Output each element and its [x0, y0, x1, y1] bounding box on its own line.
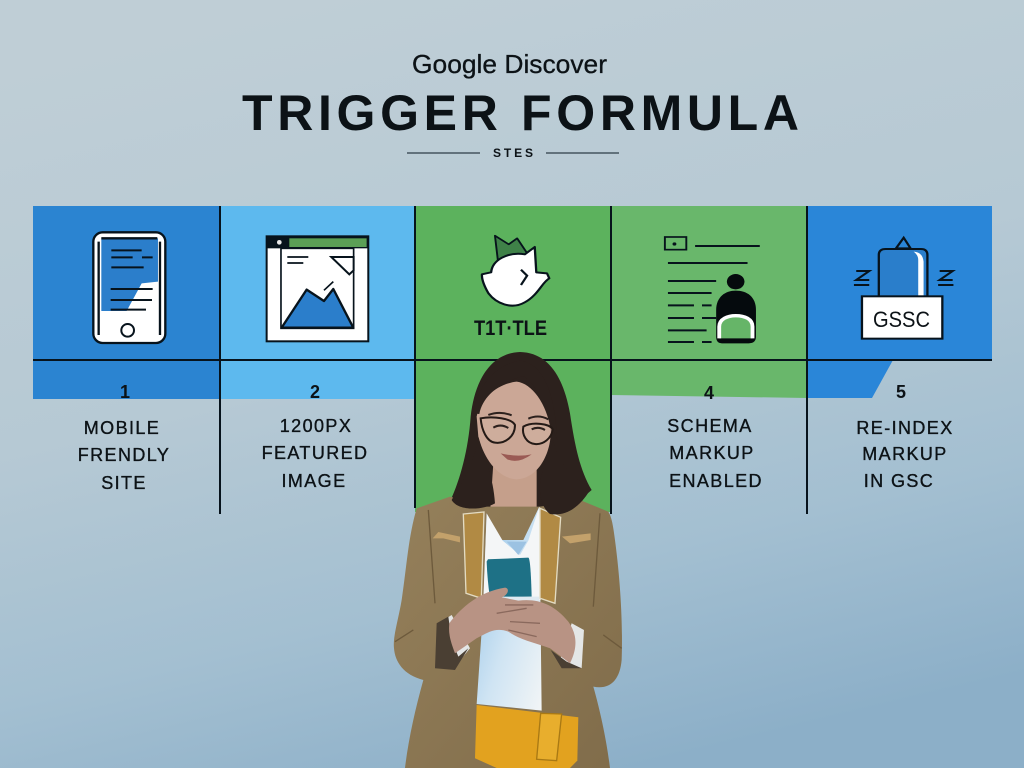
hands — [449, 588, 575, 663]
dark sleeve openings — [435, 617, 582, 670]
phone — [487, 558, 532, 598]
jacket — [394, 497, 622, 768]
step 1: MOBILE — [84, 418, 160, 438]
step 2: IMAGE — [281, 471, 347, 491]
panel 1 band — [33, 206, 220, 399]
eyebrows eyes nose — [488, 413, 548, 430]
neck — [490, 463, 537, 543]
glasses — [481, 417, 553, 444]
left cuff — [437, 615, 470, 668]
step 1: FRENDLY — [78, 445, 170, 465]
panel: step colour bands — [33, 206, 992, 512]
step 5: IN GSC — [864, 471, 934, 491]
step 4: ENABLED — [669, 471, 763, 491]
panel 2 band — [220, 206, 415, 399]
step 2: 1200PX — [280, 416, 352, 436]
panel 5 band — [807, 206, 992, 398]
grid lines — [33, 206, 992, 514]
step 2: 2 — [310, 382, 320, 402]
icon: featured image window — [267, 236, 368, 341]
step 1: 1 — [120, 382, 130, 402]
steps label with rules: STES — [493, 146, 533, 160]
subtitle: Google Discover: Google Discover — [412, 49, 607, 79]
panel 4 band — [611, 206, 807, 398]
icon: schema document with person — [665, 237, 760, 343]
heading block — [242, 49, 799, 160]
step 4: SCHEMA — [667, 416, 753, 436]
step 4 — [667, 383, 763, 491]
step 1 — [78, 382, 170, 493]
icon caption: GSSC: GSSC — [873, 307, 930, 332]
icon: GSC re-index — [854, 238, 953, 339]
step 1: SITE — [101, 473, 147, 493]
step 4: MARKUP — [669, 443, 755, 463]
jacket lining right — [540, 508, 561, 603]
woman holding phone — [394, 352, 622, 768]
step 4: 4 — [704, 383, 714, 403]
step 2: FEATURED — [262, 443, 368, 463]
step 5: MARKUP — [862, 444, 948, 464]
sleeve seams — [395, 510, 622, 648]
step 5 — [856, 382, 954, 491]
panel 3 band — [415, 206, 611, 512]
belt bag — [475, 705, 578, 768]
shirt — [477, 507, 542, 711]
jacket pocket trims — [433, 532, 591, 543]
icon: mobile phone — [93, 232, 165, 343]
smile — [501, 453, 532, 461]
icon: title badge — [482, 236, 549, 306]
jacket lining left — [463, 512, 484, 598]
icon caption: title: T1T·TLE — [474, 317, 547, 340]
right cuff — [560, 623, 584, 668]
shirt lower under phone — [484, 597, 539, 617]
hair back — [451, 352, 592, 515]
step 2 — [262, 382, 368, 491]
face — [477, 382, 551, 479]
title: Trigger Formula: TRIGGER FORMULA — [242, 85, 799, 141]
hair fringe — [473, 361, 557, 440]
step 5: 5 — [896, 382, 906, 402]
step 5: RE-INDEX — [856, 418, 954, 438]
